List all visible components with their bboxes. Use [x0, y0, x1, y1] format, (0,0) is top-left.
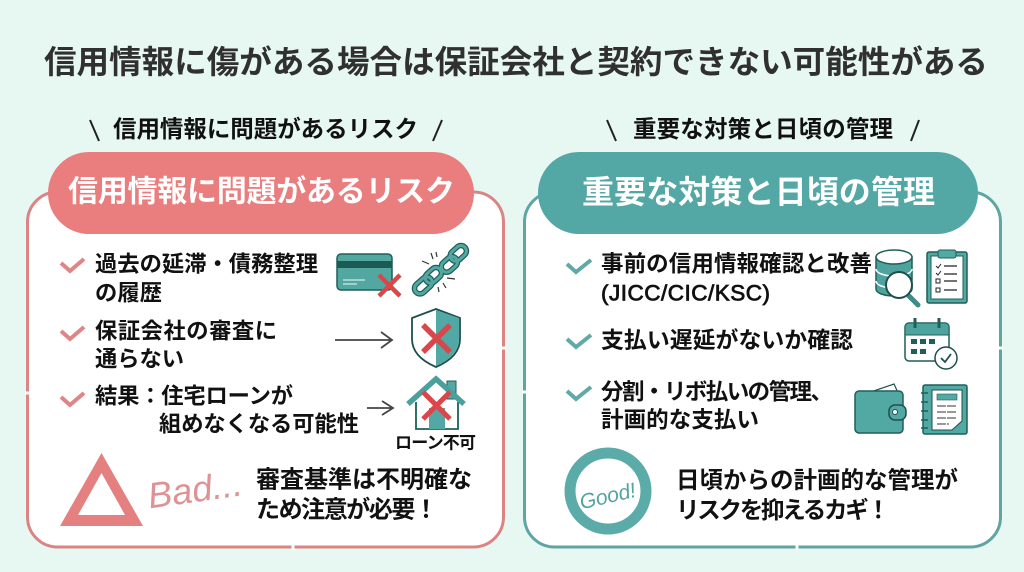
risk item 1: 過去の延滞・債務整理 — [95, 252, 318, 276]
caution message: ため注意が必要！ — [256, 496, 438, 524]
icon: database search — [876, 250, 918, 305]
left panel frame — [25, 192, 506, 550]
measure item 1: (JICC/CIC/KSC) — [601, 280, 770, 306]
key message: 日頃からの計画的な管理が — [676, 466, 958, 493]
icon: shield rejected — [412, 309, 460, 367]
key message: リスクを抑えるカギ！ — [676, 497, 890, 523]
good circle: Good! — [577, 479, 638, 514]
risk item 1: の履歴 — [95, 280, 162, 306]
bad handwritten note: Bad... — [145, 462, 245, 516]
right header pill: 重要な対策と日頃の管理 — [582, 174, 935, 210]
risk item 1 — [61, 252, 318, 306]
good circle — [570, 453, 646, 529]
warning triangle — [60, 453, 143, 526]
risk item 2 — [61, 318, 277, 372]
risk item 3: 結果：住宅ローンが — [95, 382, 293, 408]
icon: broken chain — [412, 243, 469, 296]
right panel frame — [522, 192, 1003, 550]
panel: credit risk — [25, 115, 506, 550]
icon: credit card rejected — [337, 254, 400, 296]
key message — [676, 466, 958, 523]
loan unavailable label: ローン不可 — [395, 434, 476, 452]
left header pill: 信用情報に問題があるリスク — [68, 174, 455, 208]
measure item 2: 支払い遅延がないか確認 — [601, 327, 853, 353]
arrow to shield — [335, 332, 392, 348]
measure item 1: 事前の信用情報確認と改善 — [601, 252, 872, 276]
icon: clipboard checklist — [927, 250, 967, 303]
icon: wallet — [855, 384, 906, 433]
risk item 2: 保証会社の審査に — [95, 318, 277, 344]
title: 信用情報に傷がある場合は保証会社と契約できない可能性がある — [44, 44, 988, 80]
right header pill — [538, 152, 978, 234]
measure item 3: 計画的な支払い — [601, 408, 759, 432]
measure item 1 — [567, 252, 872, 306]
arrow to house — [367, 401, 393, 415]
icon: calendar check — [905, 318, 957, 369]
left header pill — [48, 152, 474, 234]
panel: countermeasures — [522, 116, 1003, 550]
risk item 2: 通らない — [95, 346, 184, 372]
risk item 3: 組めなくなる可能性 — [159, 412, 359, 436]
left sub-heading: 信用情報に問題があるリスク — [113, 115, 418, 142]
icon: house rejected — [408, 379, 464, 429]
measure item 3 — [567, 380, 833, 432]
measure item 3: 分割・リボ払いの管理、 — [601, 380, 833, 404]
right sub-heading: 重要な対策と日頃の管理 — [633, 116, 893, 142]
caution message — [256, 466, 472, 524]
icon: notebook — [921, 385, 967, 434]
caution message: 審査基準は不明確な — [256, 466, 472, 494]
risk item 3 — [61, 382, 359, 436]
